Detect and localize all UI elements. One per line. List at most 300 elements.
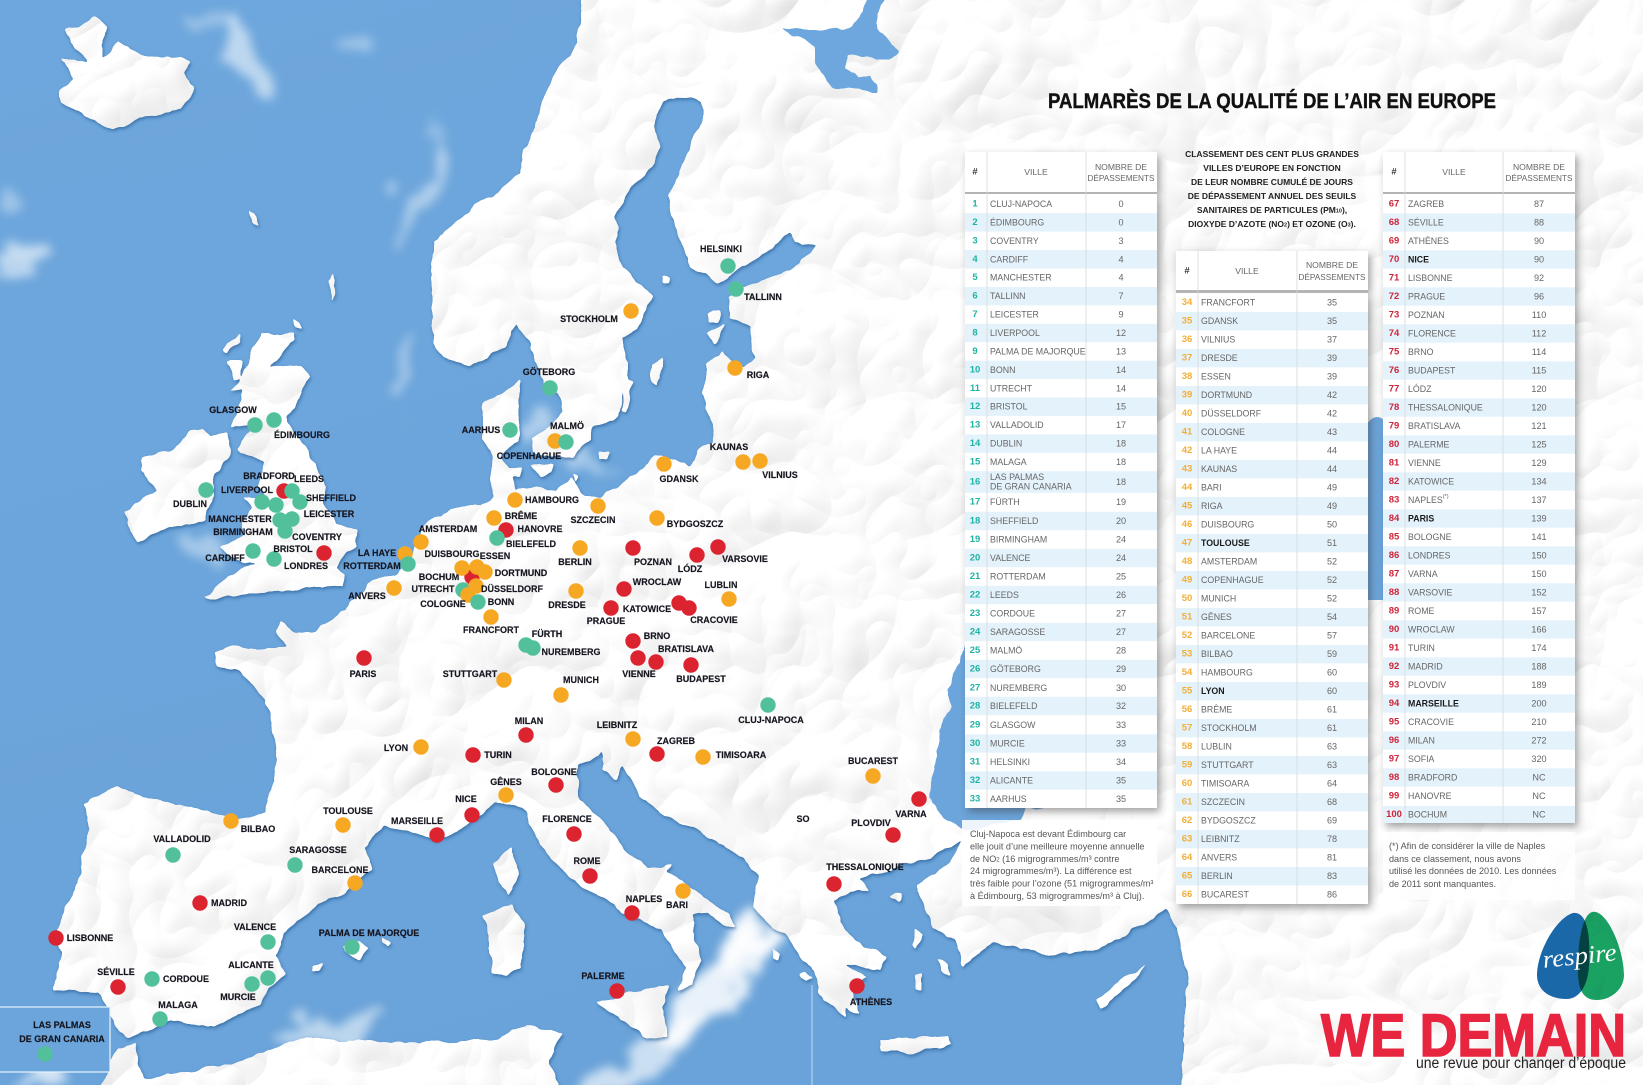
city: Bologne: BOLOGNE <box>531 767 577 777</box>
table 3: ranks 67 to 100: BRNO <box>1408 347 1434 357</box>
city: Amsterdam: AMSTERDAM <box>419 524 477 534</box>
table 2: ranks 34 to 66: 54 <box>1182 667 1193 678</box>
table 1: ranks 1 to 33: 34 <box>1116 757 1126 767</box>
table 3: ranks 67 to 100: 72 <box>1389 291 1399 302</box>
table 2: ranks 34 to 66: 34 <box>1182 297 1193 308</box>
table 2: ranks 34 to 66: 51 <box>1327 538 1337 548</box>
table 1: ranks 1 to 33: 28 <box>970 700 980 712</box>
note: Cluj-Napoca: elle jouit d’une meilleure moyenne annuelle <box>970 841 1144 851</box>
table 1: ranks 1 to 33: HELSINKI <box>990 757 1030 767</box>
city: Birmingham <box>213 512 288 537</box>
table 3: ranks 67 to 100: 70 <box>1389 254 1399 265</box>
city: Berlin: BERLIN <box>558 557 592 567</box>
table 3: ranks 67 to 100: 320 <box>1531 754 1547 764</box>
table 1: ranks 1 to 33: 24 <box>970 626 981 638</box>
city: Lyon: LYON <box>384 743 408 753</box>
table 3: ranks 67 to 100: POZNAN <box>1408 310 1445 320</box>
table 1: ranks 1 to 33: BONN <box>990 365 1015 375</box>
table 3: ranks 67 to 100: PRAGUE <box>1408 292 1445 302</box>
city: Aarhus <box>462 422 518 438</box>
table 2: ranks 34 to 66: 60 <box>1327 668 1337 678</box>
city: Cracovie: CRACOVIE <box>690 615 738 625</box>
table 3: ranks 67 to 100: VARNA <box>1408 569 1438 579</box>
city: Valence: VALENCE <box>234 922 276 932</box>
table 3: ranks 67 to 100: 76 <box>1389 365 1399 376</box>
city: Saragosse: SARAGOSSE <box>289 845 347 855</box>
city: Kaunas: KAUNAS <box>710 442 748 452</box>
table 3: ranks 67 to 100: 90 <box>1534 236 1544 246</box>
city: Cologne <box>420 587 476 609</box>
table 3: ranks 67 to 100: CRACOVIE <box>1408 717 1454 727</box>
city: Munich: MUNICH <box>563 675 599 685</box>
table 2: ranks 34 to 66: DUISBOURG <box>1201 520 1254 530</box>
table 3: ranks 67 to 100: 150 <box>1531 550 1547 560</box>
table 2: ranks 34 to 66: LYON <box>1201 686 1225 696</box>
table 1: ranks 1 to 33: 27 <box>970 682 980 693</box>
city: Dublin <box>173 482 214 509</box>
city: Utrecht: UTRECHT <box>412 584 455 594</box>
table 1: ranks 1 to 33: 12 <box>1116 328 1126 338</box>
table 2: ranks 34 to 66: 65 <box>1182 871 1193 882</box>
table 3: ranks 67 to 100: 81 <box>1389 458 1400 468</box>
table 2: ranks 34 to 66: STOCKHOLM <box>1201 723 1257 733</box>
city: Nice: NICE <box>455 794 477 804</box>
city: Bonn: BONN <box>488 597 514 607</box>
table 2: ranks 34 to 66: AMSTERDAM <box>1201 557 1257 567</box>
city: Rome <box>574 856 600 884</box>
table 2: ranks 34 to 66: 35 <box>1327 298 1337 308</box>
table 3: ranks 67 to 100: 73 <box>1389 310 1399 320</box>
city: Barcelone <box>311 865 369 891</box>
legend box: Las Palmas <box>0 1007 110 1072</box>
city: Malmö: MALMÖ <box>550 421 584 431</box>
table 3: ranks 67 to 100: 68 <box>1389 217 1399 228</box>
subtitle: SANITAIRES DE PARTICULES (PM <box>1197 205 1336 215</box>
table 3: ranks 67 to 100: 80 <box>1389 439 1399 450</box>
table 1: ranks 1 to 33: 26 <box>1116 590 1126 600</box>
table 3: ranks 67 to 100: 83 <box>1389 494 1399 506</box>
table 3: ranks 67 to 100: 188 <box>1531 662 1547 672</box>
city: Bristol: BRISTOL <box>273 544 313 554</box>
city: Tallinn <box>728 281 782 302</box>
city: Duisbourg: DUISBOURG <box>424 549 480 559</box>
city: Berlin <box>558 540 592 567</box>
table 3: ranks 67 to 100: ATHÈNES <box>1408 236 1449 246</box>
table 2: ranks 34 to 66: 36 <box>1182 334 1192 345</box>
city: Dresde: DRESDE <box>548 600 586 610</box>
city: Milan <box>515 716 543 743</box>
table 2: ranks 34 to 66: NOMBRE DE <box>1306 260 1358 270</box>
table 3: ranks 67 to 100: BOCHUM <box>1408 810 1447 820</box>
city: Malaga: MALAGA <box>158 1000 198 1010</box>
city: Bratislava: BRATISLAVA <box>658 644 714 654</box>
table 3: ranks 67 to 100: 200 <box>1531 698 1547 708</box>
table 2: ranks 34 to 66: # <box>1184 266 1190 276</box>
table 3: ranks 67 to 100: 210 <box>1531 717 1547 727</box>
table 3: ranks 67 to 100: ROME <box>1408 606 1435 616</box>
city: Katowice <box>623 595 687 614</box>
city: Alicante <box>228 960 276 986</box>
table 2: ranks 34 to 66: 42 <box>1327 390 1337 400</box>
city: Bologne <box>531 767 577 793</box>
city: Athènes: ATHÈNES <box>850 997 892 1007</box>
table 1: ranks 1 to 33: 24 <box>1116 534 1126 544</box>
city: Dresde <box>548 583 586 610</box>
table 2: ranks 34 to 66: 86 <box>1327 890 1337 900</box>
city: Barcelone: BARCELONE <box>311 865 369 875</box>
table 2: ranks 34 to 66: BRÊME <box>1201 705 1232 715</box>
table 2: ranks 34 to 66: 35 <box>1182 316 1193 327</box>
table 3: ranks 67 to 100: HANOVRE <box>1408 791 1452 801</box>
city: Copenhague: COPENHAGUE <box>497 451 561 461</box>
table 3: ranks 67 to 100: 152 <box>1531 588 1547 598</box>
table 1: ranks 1 to 33: 29 <box>1116 664 1126 674</box>
table 1: ranks 1 to 33: 10 <box>970 364 980 375</box>
table 3: ranks 67 to 100: 174 <box>1531 643 1547 653</box>
city: Munich <box>553 675 599 703</box>
city: Cluj-Napoca: CLUJ-NAPOCA <box>738 715 804 725</box>
table 1: ranks 1 to 33: 3 <box>1118 236 1124 246</box>
table 3: ranks 67 to 100: NC <box>1532 772 1546 782</box>
table 2: ranks 34 to 66: 66 <box>1182 889 1192 900</box>
table 1: ranks 1 to 33: PALMA DE MAJORQUE <box>990 346 1086 356</box>
table 1: ranks 1 to 33: FÜRTH <box>990 497 1020 507</box>
city: Plovdiv: PLOVDIV <box>851 818 891 828</box>
table 2: ranks 34 to 66: 61 <box>1182 797 1193 808</box>
table 3: ranks 67 to 100: DÉPASSEMENTS <box>1506 173 1573 183</box>
city: Nice <box>455 794 480 823</box>
table 2: ranks 34 to 66: 78 <box>1327 834 1337 844</box>
city: Turin: TURIN <box>484 750 512 760</box>
city: Marseille <box>391 816 445 843</box>
table 1: ranks 1 to 33: 35 <box>1116 776 1126 786</box>
table 1: ranks 1 to 33: 17 <box>1116 420 1126 430</box>
city: Varna: VARNA <box>895 809 927 819</box>
city: Stuttgart: STUTTGART <box>443 669 498 679</box>
table 3: ranks 67 to 100: 67 <box>1389 198 1399 210</box>
table 2: ranks 34 to 66: 81 <box>1327 853 1337 863</box>
city: Paris: PARIS <box>350 669 376 679</box>
city: Thessalonique: THESSALONIQUE <box>826 862 904 872</box>
table 2: ranks 34 to 66: 60 <box>1327 686 1337 696</box>
city: Essen: ESSEN <box>480 551 510 561</box>
city: Helsinki <box>700 244 742 274</box>
city: Utrecht <box>412 582 471 598</box>
city: Florence: FLORENCE <box>542 814 592 824</box>
city: Naples <box>624 894 662 921</box>
table 1: ranks 1 to 33: NOMBRE DE <box>1095 162 1147 172</box>
city: Leibnitz <box>597 720 641 747</box>
city: Francfort <box>463 609 519 635</box>
table 3: ranks 67 to 100: WROCLAW <box>1408 624 1455 634</box>
table 1: ranks 1 to 33: BIELEFELD <box>990 701 1037 711</box>
table 1: ranks 1 to 33: LAS PALMAS <box>990 472 1044 482</box>
city: Wroclaw: WROCLAW <box>633 577 682 587</box>
table 3: ranks 67 to 100: 75 <box>1389 346 1400 358</box>
subtitle: ), <box>1342 205 1347 215</box>
table 2: ranks 34 to 66: 44 <box>1327 464 1337 474</box>
table 2: ranks 34 to 66: 49 <box>1182 575 1192 586</box>
city: Göteborg <box>523 367 575 396</box>
table 1: ranks 1 to 33: SARAGOSSE <box>990 627 1045 637</box>
tagline: une revue pour changer d’époque <box>1416 1055 1626 1072</box>
table 3: ranks 67 to 100: 112 <box>1532 328 1546 338</box>
table 3: ranks 67 to 100: 137 <box>1531 495 1547 505</box>
city: Poznan <box>625 540 672 567</box>
table 3: ranks 67 to 100: MADRID <box>1408 662 1443 672</box>
city: Nuremberg: NUREMBERG <box>541 647 601 657</box>
table 3: ranks 67 to 100: 90 <box>1534 254 1544 264</box>
table 1: ranks 1 to 33: 31 <box>970 756 981 768</box>
city: Vienne: VIENNE <box>622 669 656 679</box>
table 2: ranks 34 to 66: 64 <box>1182 852 1193 863</box>
city: Bari <box>666 883 691 910</box>
table 1: ranks 1 to 33: BRISTOL <box>990 402 1028 412</box>
city: Bradford: BRADFORD <box>243 471 295 481</box>
table 1: ranks 1 to 33: SHEFFIELD <box>990 516 1038 526</box>
table 1: ranks 1 to 33: 7 <box>1118 291 1124 301</box>
table 1: ranks 1 to 33: LIVERPOOL <box>990 328 1040 338</box>
table 3: ranks 67 to 100: 120 <box>1531 402 1547 412</box>
city: Brême <box>486 510 537 526</box>
table 3: ranks 67 to 100: 129 <box>1531 458 1547 468</box>
table 1: ranks 1 to 33: BIRMINGHAM <box>990 534 1047 544</box>
table 2: ranks 34 to 66: BUCAREST <box>1201 890 1250 900</box>
table 2: ranks 34 to 66: GDANSK <box>1201 316 1238 326</box>
table 1: ranks 1 to 33: 0 <box>1118 217 1124 227</box>
table 1: ranks 1 to 33: 8 <box>972 328 978 338</box>
city: Alicante: ALICANTE <box>228 960 274 970</box>
table 2: ranks 34 to 66: 42 <box>1182 445 1192 456</box>
title: PALMARÈS DE LA QUALITÉ DE L’AIR EN EUROPE <box>1048 90 1496 113</box>
table 1: ranks 1 to 33: 28 <box>1116 646 1126 656</box>
table 2: ranks 34 to 66: 63 <box>1327 742 1337 752</box>
note: Cluj-Napoca: (16 migrogrammes/m³ contre <box>1000 854 1119 864</box>
city: Birmingham: BIRMINGHAM <box>213 527 273 537</box>
subtitle: DE LEUR NOMBRE CUMULÉ DE JOURS <box>1191 177 1353 187</box>
table 2: ranks 34 to 66: 63 <box>1327 760 1337 770</box>
table 1: ranks 1 to 33: 29 <box>970 720 980 730</box>
city: Cologne: COLOGNE <box>420 599 466 609</box>
table 1: ranks 1 to 33: NUREMBERG <box>990 683 1047 693</box>
table 2: ranks 34 to 66: 37 <box>1327 335 1337 345</box>
table 2: ranks 34 to 66: BARI <box>1201 483 1222 493</box>
city: Bratislava <box>648 644 714 670</box>
table 3: ranks 67 to 100: # <box>1391 166 1397 178</box>
table 1: ranks 1 to 33: AARHUS <box>990 794 1027 804</box>
city: Aarhus: AARHUS <box>462 425 500 435</box>
subtitle: DIOXYDE D’AZOTE (NO <box>1188 219 1284 229</box>
table 2: ranks 34 to 66: 48 <box>1182 556 1192 567</box>
table 1: ranks 1 to 33: LEEDS <box>990 590 1019 600</box>
city: Milan: MILAN <box>515 716 543 726</box>
city: Fürth: FÜRTH <box>532 629 562 639</box>
table 1: ranks 1 to 33: 18 <box>970 516 980 526</box>
city: Gdansk: GDANSK <box>659 474 699 484</box>
table 2: ranks 34 to 66: MUNICH <box>1201 594 1236 604</box>
table 1: ranks 1 to 33: COVENTRY <box>990 236 1039 246</box>
table 1: ranks 1 to 33: 20 <box>970 552 980 564</box>
subtitle: CLASSEMENT DES CENT PLUS GRANDES <box>1185 149 1359 159</box>
city: Amsterdam <box>413 524 477 550</box>
city: Murcie: MURCIE <box>220 992 256 1002</box>
table 1: ranks 1 to 33: 7 <box>972 309 978 320</box>
city: Bucarest <box>848 756 898 784</box>
Caspian Sea sliver <box>1366 417 1384 600</box>
city: Brno <box>625 631 670 649</box>
table 1: ranks 1 to 33: # <box>972 166 978 178</box>
table 1: ranks 1 to 33: ÉDIMBOURG <box>990 217 1044 227</box>
table 3: ranks 67 to 100: 74 <box>1389 328 1400 339</box>
city: Leeds <box>284 474 324 499</box>
table 1: ranks 1 to 33: 27 <box>1116 627 1126 637</box>
table 2: ranks 34 to 66: 39 <box>1327 372 1337 382</box>
table 3: ranks 67 to 100: 95 <box>1389 716 1400 728</box>
table 3: ranks 67 to 100: ZAGREB <box>1408 199 1444 209</box>
city: Bucarest: BUCAREST <box>848 756 898 766</box>
table 2: ranks 34 to 66: 58 <box>1182 741 1192 752</box>
city: Valladolid: VALLADOLID <box>153 834 211 844</box>
table 3: ranks 67 to 100: BOLOGNE <box>1408 532 1452 542</box>
table 3: ranks 67 to 100: VARSOVIE <box>1408 588 1452 598</box>
city: Düsseldorf <box>468 578 543 594</box>
table 3: ranks 67 to 100: 114 <box>1532 347 1546 357</box>
table 2: ranks 34 to 66: VILNIUS <box>1201 335 1235 345</box>
table 3: ranks 67 to 100: LONDRES <box>1408 550 1451 560</box>
subtitle: 10 <box>1336 208 1342 214</box>
table 1: ranks 1 to 33: 14 <box>1116 365 1126 375</box>
table 2: ranks 34 to 66: LUBLIN <box>1201 742 1232 752</box>
table 3: ranks 67 to 100: 120 <box>1531 384 1547 394</box>
city: Paris <box>350 650 376 679</box>
table 3: ranks 67 to 100: 93 <box>1389 680 1399 690</box>
table 2: ranks 34 to 66: 47 <box>1182 538 1192 549</box>
city: Palma de Majorque <box>319 928 419 955</box>
city: Brême: BRÊME <box>505 510 537 521</box>
table 3: ranks 67 to 100: NOMBRE DE <box>1513 162 1565 172</box>
Black Sea <box>930 640 1100 830</box>
note: Cluj-Napoca: 2 <box>996 857 1000 863</box>
city: La Haye: LA HAYE <box>358 548 396 558</box>
city: Athènes <box>849 978 892 1007</box>
table 1: ranks 1 to 33: 14 <box>970 438 981 449</box>
table 1: ranks 1 to 33: 15 <box>1116 402 1126 412</box>
table 1: ranks 1 to 33: 13 <box>1116 346 1126 356</box>
table 3: ranks 67 to 100: 91 <box>1389 642 1400 654</box>
table 2: ranks 34 to 66: 39 <box>1327 353 1337 363</box>
table 2: ranks 34 to 66: BILBAO <box>1201 649 1233 659</box>
table 2: ranks 34 to 66: 37 <box>1182 353 1192 364</box>
table 2: ranks 34 to 66: STUTTGART <box>1201 760 1254 770</box>
table 1: ranks 1 to 33: 25 <box>970 645 981 656</box>
table 2: ranks 34 to 66: 62 <box>1182 815 1192 826</box>
table 2: ranks 34 to 66: 38 <box>1182 371 1192 382</box>
city: Cardiff <box>205 543 261 563</box>
city: Szczecin <box>570 498 616 525</box>
table 2: ranks 34 to 66: 45 <box>1182 501 1193 512</box>
table 1: ranks 1 to 33: ROTTERDAM <box>990 572 1046 582</box>
city: Kaunas <box>710 442 751 470</box>
table 2: ranks 34 to 66: 52 <box>1327 575 1337 585</box>
table 3: ranks 67 to 100: 96 <box>1534 292 1544 302</box>
table 2: ranks 34 to 66: 63 <box>1182 834 1192 845</box>
table 1: ranks 1 to 33: DUBLIN <box>990 439 1022 449</box>
table 2: ranks 34 to 66: 61 <box>1327 705 1337 715</box>
table 2: ranks 34 to 66: 59 <box>1182 760 1192 771</box>
table 3: ranks 67 to 100: MARSEILLE <box>1408 698 1459 708</box>
city: Bielefeld: BIELEFELD <box>506 539 556 549</box>
subtitle: DE DÉPASSEMENT ANNUEL DES SEUILS <box>1188 191 1357 201</box>
city: Toulouse: TOULOUSE <box>323 806 373 816</box>
table 2: ranks 34 to 66: DORTMUND <box>1201 390 1252 400</box>
city: Sheffield <box>292 493 356 510</box>
subtitle: ) ET OZONE (O <box>1287 219 1348 229</box>
city: Helsinki: HELSINKI <box>700 244 742 254</box>
city: Gênes <box>490 776 522 803</box>
table 2: ranks 34 to 66: BARCELONE <box>1201 631 1255 641</box>
table 2: ranks 34 to 66: HAMBOURG <box>1201 668 1253 678</box>
table 1: ranks 1 to 33: GLASGOW <box>990 720 1036 730</box>
table 2: ranks 34 to 66: 42 <box>1327 409 1337 419</box>
table 1: ranks 1 to 33: UTRECHT <box>990 383 1033 393</box>
table 1: ranks 1 to 33: 18 <box>1116 457 1126 467</box>
table 2: ranks 34 to 66: 41 <box>1182 427 1193 438</box>
table 1: ranks 1 to 33: 9 <box>1118 310 1124 320</box>
table 1: ranks 1 to 33: 3 <box>972 235 978 246</box>
table 1: ranks 1 to 33: GÖTEBORG <box>990 664 1041 674</box>
table 2: ranks 34 to 66: BERLIN <box>1201 871 1233 881</box>
table 2: ranks 34 to 66: 53 <box>1182 649 1192 660</box>
table 3: ranks 67 to 100: NC <box>1532 791 1546 801</box>
table 3: ranks 67 to 100: 92 <box>1389 661 1399 672</box>
table 3: ranks 67 to 100: 86 <box>1389 550 1399 561</box>
city: Varsovie: VARSOVIE <box>722 554 768 564</box>
city: Thessalonique <box>826 862 904 892</box>
city: Plovdiv <box>851 818 901 843</box>
city: Malaga <box>152 1000 198 1027</box>
table 3: ranks 67 to 100: 125 <box>1531 440 1547 450</box>
city: Malmö <box>550 421 584 450</box>
table 2: ranks 34 to 66: DRESDE <box>1201 353 1238 363</box>
city: Glasgow: GLASGOW <box>209 405 257 415</box>
city: Coventry: COVENTRY <box>292 532 342 542</box>
city: Manchester <box>208 497 284 524</box>
table 3: ranks 67 to 100: 78 <box>1389 402 1399 413</box>
city: Zagreb <box>649 736 696 762</box>
table 2: ranks 34 to 66: 52 <box>1182 630 1192 641</box>
table 2: ranks 34 to 66: 49 <box>1327 483 1337 493</box>
table 1: ranks 1 to 33: 23 <box>970 608 980 619</box>
city: Nuremberg <box>525 640 601 657</box>
clouds over the sea <box>0 9 790 1085</box>
city: Hambourg <box>507 492 579 508</box>
table 3: ranks 67 to 100: 88 <box>1389 587 1399 598</box>
table 2: ranks 34 to 66: COLOGNE <box>1201 427 1245 437</box>
city: Göteborg: GÖTEBORG <box>523 367 575 377</box>
table 2: ranks 34 to 66: 50 <box>1327 520 1337 530</box>
logo: respire lungs: respire <box>1541 939 1618 974</box>
table 2: ranks 34 to 66: 52 <box>1327 594 1337 604</box>
city: Timisoara: TIMISOARA <box>716 750 767 760</box>
table 2: ranks 34 to 66 <box>1176 251 1368 904</box>
table 3: ranks 67 to 100: SÉVILLE <box>1408 218 1444 228</box>
city: Vienne <box>622 650 656 679</box>
table 3: ranks 67 to 100: PALERME <box>1408 440 1450 450</box>
table 1: ranks 1 to 33: 25 <box>1116 572 1126 582</box>
city: Stockholm <box>560 303 639 324</box>
note: Cluj-Napoca: à Édimbourg, 53 migrogrammes/m³ à Cluj). <box>970 891 1144 901</box>
table 3: ranks 67 to 100: 121 <box>1531 421 1547 431</box>
